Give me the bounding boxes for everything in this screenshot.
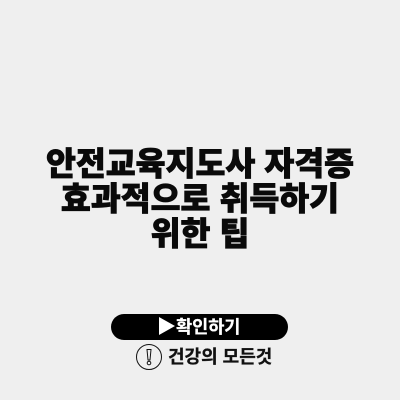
button label: 확인하기 (176, 317, 240, 337)
title line 3: 위한 팁 (151, 216, 249, 252)
title (46, 146, 354, 252)
title line 1: 안전교육지도사 자격증 (46, 146, 354, 182)
icon: exclamation circle (136, 344, 162, 370)
brand name: 건강의 모든것 (168, 347, 272, 367)
title line 2: 효과적으로 취득하기 (61, 181, 339, 217)
button: confirm (111, 314, 288, 340)
icon: play triangle (159, 317, 175, 335)
